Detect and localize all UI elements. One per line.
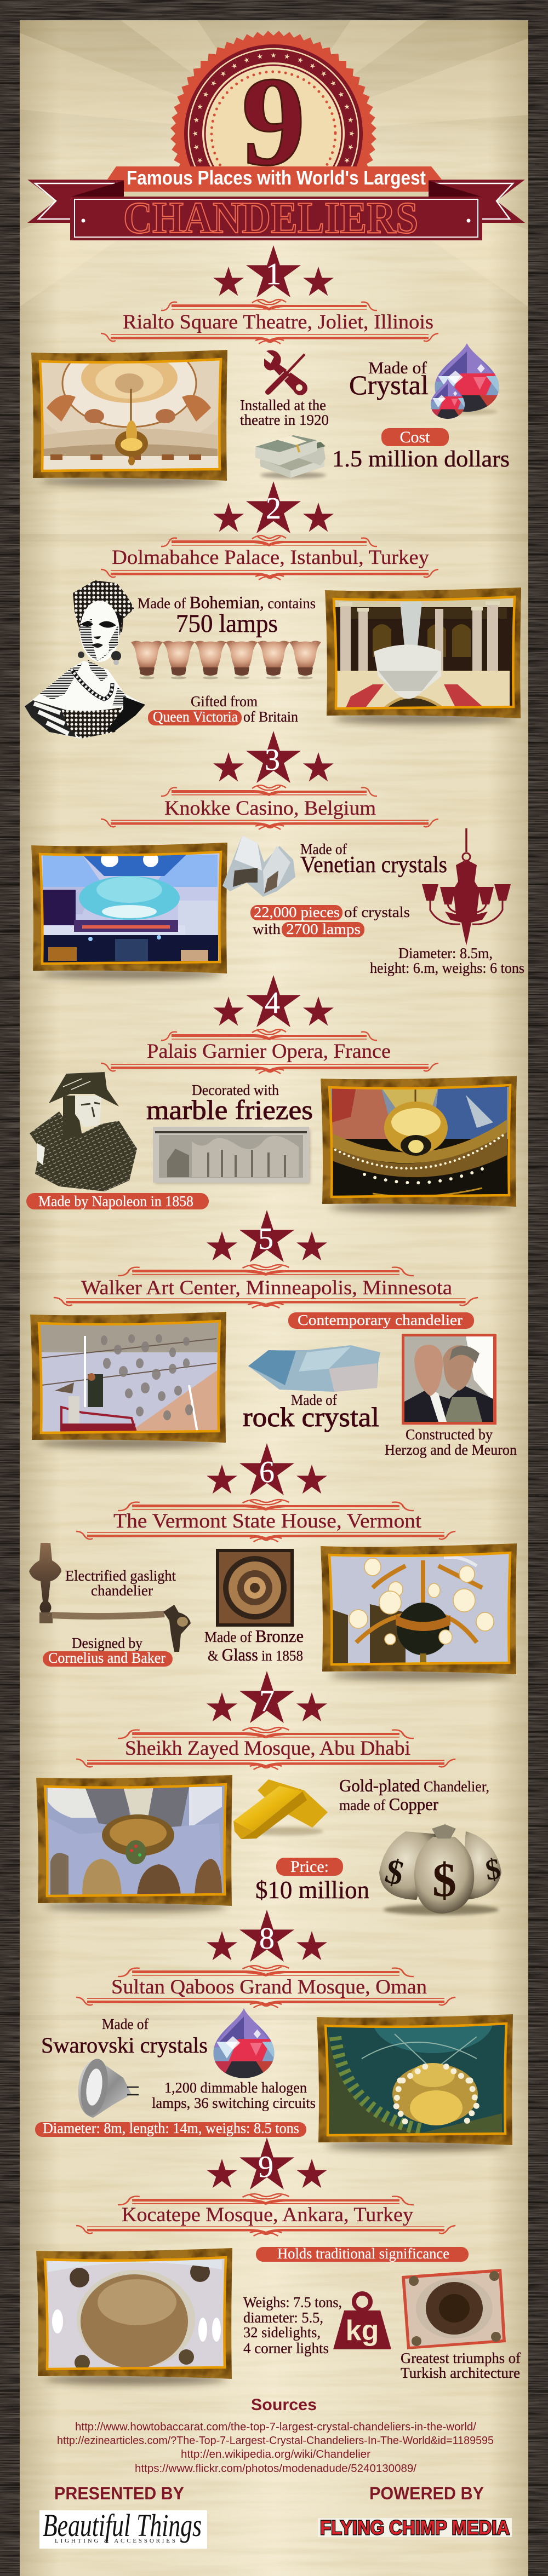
price: $10 million (255, 1876, 369, 1904)
image: bronze tile (216, 1549, 294, 1627)
price (255, 1858, 369, 1904)
section 4 header (101, 975, 438, 1074)
section 4 header: Palais Garnier Opera, France (147, 1040, 391, 1063)
cost: Cost (399, 428, 430, 446)
icon: tools (264, 350, 307, 395)
text: diameter (370, 945, 524, 976)
photo: Walker Art Center (30, 1312, 226, 1449)
image: marble frieze (153, 1127, 310, 1184)
text: gold-plated chandelier: Gold-plated Chandelier, (339, 1776, 489, 1795)
text: gaslight (65, 1568, 176, 1599)
section 1 header: Rialto Square Theatre, Joliet, Illinois (123, 311, 433, 333)
icon: chandelier silhouette (422, 828, 511, 946)
photo: Sultan Qaboos Mosque (317, 2014, 513, 2157)
text: rock crystal: rock crystal (243, 1402, 379, 1432)
image: gold bars (233, 1779, 328, 1839)
text: greatest triumphs: Greatest triumphs of (401, 2350, 521, 2366)
pill: contemporary chandelier: Contemporary chandelier (298, 1312, 463, 1328)
section 3 header: 3 (265, 743, 280, 777)
section 2 header: Dolmabahce Palace, Istanbul, Turkey (112, 546, 430, 569)
logo: Beautiful Things: LIGHTING & ACCESSORIES (55, 2538, 175, 2544)
icon: halogen bulb (77, 2057, 139, 2118)
section 7 header: 7 (259, 1684, 275, 1718)
section 9 header: 9 (258, 2150, 273, 2184)
title ribbon (27, 166, 525, 243)
photo: dome (402, 2269, 506, 2349)
text: weighs: Weighs: 7.5 tons, (243, 2294, 342, 2310)
powered by heading: POWERED BY (369, 2483, 484, 2503)
badge with number 9 (170, 31, 376, 237)
text: Venetian crystals: Venetian crystals (300, 852, 447, 878)
section 6 header: 6 (259, 1455, 275, 1489)
text: 22,000 pieces with 2700 lamps (250, 904, 410, 937)
sources list: http://ezinearticles.com/?The-Top-7-Largest-Crystal-Chandeliers-In-The-World&id=1189595 (57, 2435, 494, 2447)
photo: Vermont State House (321, 1543, 517, 1680)
pill: traditional significance: Holds traditional significance (277, 2245, 449, 2262)
text: constructed by (385, 1426, 517, 1458)
section 9 header (76, 2137, 455, 2236)
text: weighs: 4 corner lights (243, 2340, 329, 2356)
photo: Dolmabahce Palace (325, 587, 521, 724)
photo: Sheikh Zayed Mosque (36, 1775, 232, 1912)
icon: crystal drops (430, 343, 500, 419)
icon: money bags: $ (381, 1851, 408, 1893)
presented by heading: PRESENTED BY (54, 2483, 184, 2503)
icon: kg weight (333, 2293, 391, 2349)
section 3 header: Knokke Casino, Belgium (164, 797, 376, 820)
text: Bohemian lamps: 750 lamps (176, 609, 278, 638)
photo: Rialto Square Theatre (31, 350, 227, 492)
sources list (57, 2421, 494, 2475)
section 6 header (76, 1443, 455, 1542)
section 5 header: Walker Art Center, Minneapolis, Minnesota (81, 1277, 452, 1299)
upper red band (107, 166, 442, 193)
text: Swarovski crystals: Swarovski crystals (41, 2033, 208, 2058)
icon: kg weight: kg (346, 2315, 379, 2347)
cost (332, 428, 510, 472)
sources heading: Sources (251, 2396, 317, 2414)
text: Swarovski crystals (41, 2016, 208, 2058)
text: Bohemian lamps: Made of Bohemian, contains (138, 592, 316, 612)
sources list: http://www.howtobaccarat.com/the-top-7-largest-crystal-chandeliers-in-the-world/ (75, 2421, 476, 2433)
price: Price: (290, 1858, 329, 1876)
logo: Beautiful Things (39, 2508, 207, 2549)
text: gifted from Queen Victoria: of Britain (243, 708, 298, 725)
image: rock crystal (248, 1345, 380, 1392)
icon: money bags: $ (432, 1854, 456, 1907)
text: constructed by: Herzog and de Meuron (385, 1442, 517, 1458)
text: diameter: height: 6.m, weighs: 6 tons (370, 960, 524, 976)
photo: Knokke Casino (31, 843, 227, 979)
icon: money stacks (255, 435, 326, 479)
section 2 header (101, 481, 438, 580)
icon: raw crystal (222, 835, 295, 897)
text: diameter: Diameter: 8.5m, (398, 945, 493, 961)
text: designed by (43, 1635, 173, 1667)
section 9 header: Kocatepe Mosque, Ankara, Turkey (122, 2204, 414, 2226)
ribbon tails (27, 180, 164, 223)
section 1 header (101, 245, 438, 344)
text: weighs (243, 2294, 342, 2356)
text: installed: Installed at the (240, 397, 326, 413)
text: made of crystal: Made of (368, 358, 427, 377)
text: gaslight: Electrified gaslight (65, 1568, 176, 1584)
icon: crystal (212, 2008, 276, 2079)
section 8 header: 8 (259, 1922, 275, 1956)
text: installed (240, 397, 329, 428)
section 8 header: Sultan Qaboos Grand Mosque, Oman (111, 1976, 427, 1998)
section 4 header: 4 (265, 986, 280, 1020)
text: constructed by: Constructed by (406, 1426, 493, 1443)
text: gold-plated chandelier (339, 1776, 489, 1814)
text: marble friezes: Decorated with (192, 1082, 279, 1098)
section 8 header (76, 1910, 455, 2008)
text: marble friezes: marble friezes (146, 1094, 313, 1125)
section 2 header: 2 (266, 492, 281, 526)
text: designed by: Cornelius and Baker (48, 1650, 165, 1666)
image: gaslight fixture (29, 1543, 191, 1652)
text: installed: theatre in 1920 (240, 412, 329, 428)
section 7 header (76, 1671, 455, 1770)
logo: Beautiful Things: Beautiful Things (43, 2508, 202, 2543)
text: 22,000 pieces with 2700 lamps: of crystals (344, 904, 410, 920)
badge with number 9: 9 (241, 50, 306, 192)
engraving: Napoleon (30, 1072, 137, 1191)
text: bronze and glass: & Glass in 1858 (208, 1645, 303, 1664)
pill: Made by Napoleon: Made by Napoleon in 1858 (38, 1193, 193, 1209)
cost: 1.5 million dollars (332, 447, 510, 472)
icon: money bags: $ (483, 1852, 503, 1887)
text: 22,000 pieces with 2700 lamps: with (253, 921, 281, 937)
text: greatest triumphs: Turkish architecture (401, 2365, 520, 2381)
engraving: Queen Victoria (25, 580, 145, 739)
sources list: https://www.flickr.com/photos/modenadude/5240130089/ (135, 2463, 416, 2475)
text: gifted from Queen Victoria: Gifted from (191, 693, 258, 710)
text: gold-plated chandelier: made of Copper (339, 1794, 438, 1814)
text: weighs: 32 sidelights, (243, 2324, 321, 2341)
sources list: http://en.wikipedia.org/wiki/Chandelier (181, 2448, 370, 2460)
banner subtitle: Famous Places with World's Largest (127, 166, 426, 189)
text: bronze and glass (204, 1626, 304, 1664)
text: made of crystal: Crystal (349, 370, 429, 400)
logo: Flying Chimp Media: FLYING CHIMP MEDIA (320, 2516, 510, 2539)
icon: money bags (379, 1824, 503, 1915)
text: rock crystal: Made of (291, 1392, 337, 1408)
text: halogen: 1,200 dimmable halogen (164, 2079, 307, 2096)
photo: Kocatepe Mosque (36, 2248, 232, 2385)
text: 22,000 pieces with 2700 lamps: 22,000 pieces (254, 904, 340, 920)
section 6 header: The Vermont State House, Vermont (113, 1510, 422, 1532)
text: halogen: lamps, 36 switching circuits (152, 2095, 316, 2111)
text: gifted from Queen Victoria: Queen Victoria (153, 708, 238, 725)
text: halogen (152, 2079, 316, 2111)
main banner (70, 197, 482, 240)
section 5 header (54, 1210, 478, 1308)
text: gaslight: chandelier (91, 1582, 153, 1599)
text: Swarovski crystals: Made of (102, 2016, 149, 2032)
section 5 header: 5 (258, 1222, 273, 1256)
banner heading: CHANDELIERS (123, 193, 418, 243)
text: 22,000 pieces with 2700 lamps: 2700 lamps (286, 921, 361, 937)
text: marble friezes (146, 1082, 313, 1125)
section 1 header: 1 (266, 257, 281, 291)
photo: Palais Garnier (321, 1076, 517, 1213)
text: weighs: diameter: 5.5, (243, 2309, 323, 2326)
text: designed by: Designed by (72, 1635, 142, 1651)
text: Venetian crystals (300, 841, 447, 878)
pill: diameter: Diameter: 8m, length: 14m, weighs: 8.5 tons (43, 2120, 299, 2136)
text: Venetian crystals: Made of (300, 841, 347, 857)
text: bronze and glass: Made of Bronze (204, 1626, 304, 1646)
portrait: Herzog and de Meuron (402, 1334, 496, 1425)
section 7 header: Sheikh Zayed Mosque, Abu Dhabi (125, 1737, 410, 1760)
text: greatest triumphs (401, 2350, 521, 2381)
section 3 header (101, 731, 438, 829)
text: gifted from Queen Victoria (148, 693, 298, 725)
icons: six lamp shades (131, 641, 321, 679)
text: Bohemian lamps (138, 592, 316, 638)
